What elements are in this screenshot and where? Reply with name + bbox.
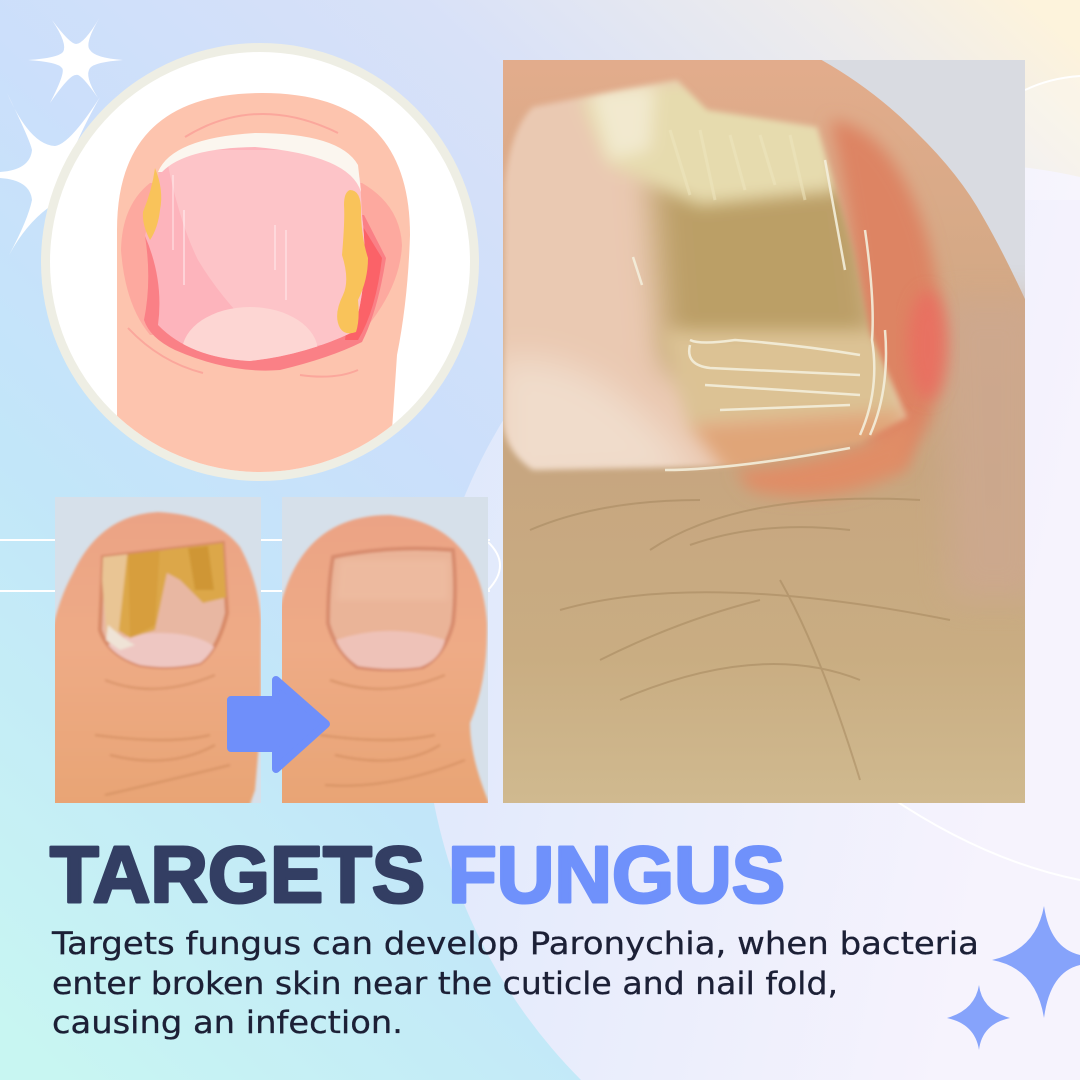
white nail tip (158, 133, 361, 192)
icon: sparkles top left (0, 17, 123, 257)
red rim (144, 215, 386, 371)
inflamed zone (121, 183, 402, 335)
nail streaks (670, 130, 805, 200)
skin wrinkles (530, 499, 950, 780)
yellow fungus (143, 168, 161, 240)
toe (117, 93, 410, 480)
body text: enter broken skin near the cuticle and nail fold, (52, 966, 838, 1002)
heading: TARGETS (50, 830, 425, 919)
nail (495, 80, 910, 490)
crease lines (185, 114, 338, 137)
heading (50, 830, 785, 919)
photo: before treatment toe (50, 497, 261, 810)
photo: after treatment toe (277, 497, 492, 810)
icon: arrow before to after (231, 680, 326, 769)
body text (51, 926, 979, 1041)
photo: large infected toe (495, 52, 1040, 810)
inflamed area (830, 120, 941, 470)
nail cracks (633, 160, 886, 470)
toe skin (495, 52, 1030, 810)
illustration: nail diagram circle (41, 43, 479, 481)
icon: sparkles bottom right (947, 906, 1080, 1050)
body text: causing an infection. (52, 1005, 403, 1041)
body text: Targets fungus can develop Paronychia, when bacteria (51, 926, 979, 962)
heading: FUNGUS (448, 830, 785, 919)
nail plate (145, 146, 365, 361)
